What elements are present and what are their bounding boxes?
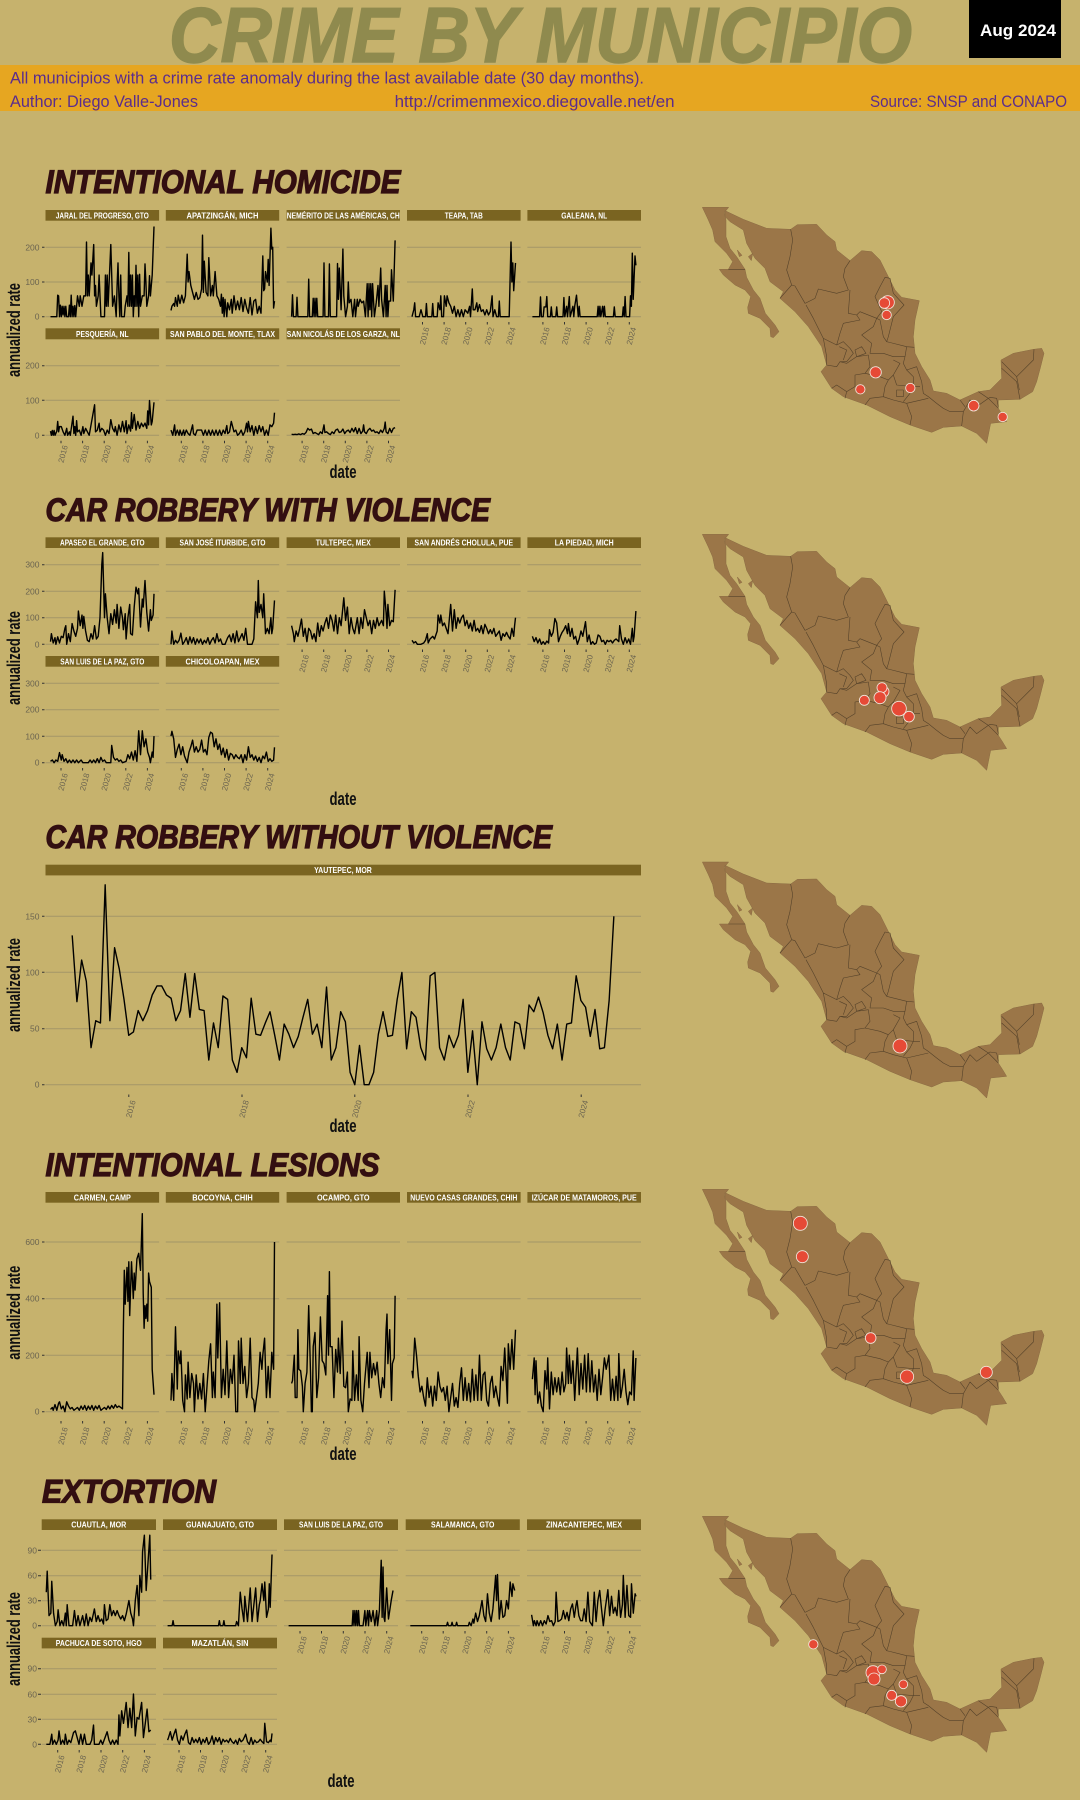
heading: INTENTIONAL LESIONS xyxy=(46,1147,380,1183)
panel: Izucar de Matamoros: 2016 xyxy=(538,1426,552,1446)
panel: Chicoloapan xyxy=(166,656,279,792)
y axis: 200 xyxy=(25,1350,40,1360)
panel: San Jose Iturbide xyxy=(166,537,279,644)
panel: Tultepec xyxy=(287,537,400,673)
y axis: 0 xyxy=(35,430,40,440)
panel: Pachuca de Soto: 2016 xyxy=(53,1754,67,1774)
y axis xyxy=(4,1545,41,1749)
panel: Teapa: 2024 xyxy=(504,326,518,346)
panel: Jaral del Progreso xyxy=(46,210,159,317)
panel: Salamanca: 2018 xyxy=(439,1635,452,1655)
y axis: 0 xyxy=(35,1080,40,1090)
y axis: 60 xyxy=(28,1689,37,1699)
y axis: 90 xyxy=(28,1545,37,1555)
panel: Cuautla: CUAUTLA, MOR xyxy=(71,1520,126,1530)
panel: San Pablo del Monte: SAN PABLO DEL MONTE, TLAX xyxy=(170,329,275,339)
heading: CAR ROBBERY WITHOUT VIOLENCE xyxy=(46,819,553,855)
panel: Galeana: GALEANA, NL xyxy=(561,210,607,220)
panel: Izucar de Matamoros: IZÚCAR DE MATAMOROS, PUE xyxy=(532,1191,637,1202)
y axis: 30 xyxy=(28,1596,37,1606)
panel: San Luis de la Paz: 2016 xyxy=(57,772,70,792)
panel: San Nicolas de los Garza: 2018 xyxy=(319,444,333,464)
y axis: 600 xyxy=(25,1237,40,1247)
panel: Yautepec: 2018 xyxy=(238,1099,251,1119)
panel: Bocoyna: 2016 xyxy=(177,1426,190,1446)
panel: San Luis de la Paz (extortion) xyxy=(284,1519,398,1655)
panel: Pesqueria: 2020 xyxy=(100,444,113,464)
panel: San Pablo del Monte: 2022 xyxy=(242,444,255,464)
panel: Apaseo el Grande xyxy=(46,537,159,644)
panel: Izucar de Matamoros: 2024 xyxy=(625,1426,638,1446)
y axis: annualized rate xyxy=(4,1266,24,1360)
map: car robbery without violence xyxy=(702,862,1044,1098)
panel: Tultepec: 2022 xyxy=(362,653,376,673)
panel: Tultepec: 2024 xyxy=(384,653,397,673)
x axis title: date xyxy=(330,789,356,809)
panel: Mazatlan xyxy=(163,1638,277,1774)
x axis title: date xyxy=(330,462,356,482)
y axis: 50 xyxy=(30,1024,40,1034)
x axis title: date xyxy=(328,1771,354,1791)
y axis: 0 xyxy=(32,1739,37,1749)
panel: Galeana: 2018 xyxy=(560,326,573,346)
panel: Pesqueria: 2016 xyxy=(57,444,70,464)
y axis: 0 xyxy=(35,1407,40,1417)
panel: Pachuca de Soto: 2018 xyxy=(75,1754,88,1774)
panel: Bocoyna: BOCOYNA, CHIH xyxy=(192,1192,253,1202)
panel: Mazatlan: MAZATLÁN, SIN xyxy=(192,1638,248,1648)
panel: Galeana: 2016 xyxy=(538,326,552,346)
y axis: annualized rate xyxy=(4,611,24,705)
panel: San Andres Cholula: 2020 xyxy=(461,653,475,673)
y axis: 300 xyxy=(25,678,40,688)
panel: Teapa xyxy=(407,210,521,346)
panel: Galeana: 2024 xyxy=(625,326,638,346)
panel: Galeana xyxy=(527,210,641,346)
panel: Pachuca de Soto: PACHUCA DE SOTO, HGO xyxy=(56,1638,142,1648)
panel: Yautepec: 2016 xyxy=(124,1099,138,1119)
panel: Jaral del Progreso: JARAL DEL PROGRESO, GTO xyxy=(56,210,149,220)
panel: Ocampo: 2016 xyxy=(298,1426,311,1446)
x axis title: date xyxy=(330,1116,356,1136)
panel: Pesqueria: 2024 xyxy=(143,444,156,464)
panel: Ocampo: 2022 xyxy=(362,1426,376,1446)
panel: San Luis de la Paz: 2024 xyxy=(143,772,156,792)
y axis xyxy=(4,1237,44,1417)
y axis: 400 xyxy=(25,1294,40,1304)
panel: Ocampo: 2018 xyxy=(319,1426,333,1446)
panel: San Luis de la Paz (extortion): 2020 xyxy=(339,1635,352,1655)
panel: San Luis de la Paz (extortion): 2022 xyxy=(361,1635,374,1655)
panel: Pachuca de Soto: 2024 xyxy=(140,1754,153,1774)
panel: Salamanca: 2020 xyxy=(461,1635,474,1655)
y axis xyxy=(4,560,44,768)
panel: Bocoyna xyxy=(166,1192,279,1446)
y axis: 100 xyxy=(25,277,40,287)
y axis: 200 xyxy=(25,586,40,596)
panel: Bocoyna: 2020 xyxy=(220,1426,233,1446)
heading: INTENTIONAL HOMICIDE xyxy=(46,164,402,200)
y axis: 90 xyxy=(28,1664,37,1674)
panel: San Andres Cholula xyxy=(407,537,521,673)
info band: http://crimenmexico.diegovalle.net/en xyxy=(395,92,675,111)
panel: Pachuca de Soto: 2020 xyxy=(97,1754,110,1774)
y axis: annualized rate xyxy=(4,938,24,1032)
panel: Galeana: 2020 xyxy=(582,326,595,346)
panel: Salamanca xyxy=(406,1519,520,1655)
section: intentional lesions xyxy=(4,1147,1044,1464)
panel: Apatzingan: APATZINGÁN, MICH xyxy=(187,210,259,220)
panel: Ocampo: 2020 xyxy=(341,1426,354,1446)
heading: EXTORTION xyxy=(42,1474,217,1510)
panel: Zinacantepec: 2016 xyxy=(539,1635,552,1655)
panel: Mazatlan: 2018 xyxy=(196,1754,209,1774)
panel: San Nicolas de los Garza xyxy=(287,328,400,464)
panel: Pesqueria xyxy=(46,328,159,464)
panel: Carmen xyxy=(46,1192,159,1446)
panel: Pachuca de Soto: 2022 xyxy=(118,1754,132,1774)
section: intentional homicide xyxy=(4,164,1044,482)
panel: Teapa: 2022 xyxy=(483,326,496,346)
panel: San Andres Cholula: 2016 xyxy=(418,653,431,673)
panel: Zinacantepec: 2020 xyxy=(582,1635,595,1655)
panel: Benemerito de las Americas xyxy=(287,210,400,317)
panel: San Pablo del Monte xyxy=(166,328,279,464)
panel: Carmen: 2022 xyxy=(121,1426,135,1446)
y axis: 150 xyxy=(25,911,40,921)
panel: Carmen: 2016 xyxy=(57,1426,70,1446)
panel: La Piedad: 2020 xyxy=(582,653,595,673)
panel: San Pablo del Monte: 2016 xyxy=(177,444,190,464)
date badge: Aug 2024 xyxy=(980,21,1057,40)
y axis: 100 xyxy=(25,967,40,977)
panel: San Luis de la Paz (extortion): 2016 xyxy=(296,1635,309,1655)
panel: Benemerito de las Americas: NEMÉRITO DE LAS AMÉRICAS, CH xyxy=(287,210,400,220)
info band: Author: Diego Valle-Jones xyxy=(10,92,198,111)
panel: Zinacantepec: ZINACANTEPEC, MEX xyxy=(546,1520,622,1530)
map: extortion xyxy=(702,1516,1044,1752)
panel: La Piedad: 2016 xyxy=(538,653,552,673)
panel: San Luis de la Paz (extortion): 2018 xyxy=(317,1635,330,1655)
panel: San Luis de la Paz (extortion): SAN LUIS DE LA PAZ, GTO xyxy=(299,1520,383,1530)
panel: Nuevo Casas Grandes: 2016 xyxy=(418,1426,431,1446)
panel: Nuevo Casas Grandes: 2020 xyxy=(461,1426,475,1446)
panel: Nuevo Casas Grandes: 2024 xyxy=(504,1426,518,1446)
panel: Ocampo: 2024 xyxy=(384,1426,397,1446)
panel: San Luis de la Paz (extortion): 2024 xyxy=(382,1635,396,1655)
panel: San Jose Iturbide: SAN JOSÉ ITURBIDE, GTO xyxy=(180,538,266,548)
panel: Tultepec: 2018 xyxy=(319,653,333,673)
panel: Izucar de Matamoros: 2020 xyxy=(582,1426,595,1446)
panel: Salamanca: 2024 xyxy=(504,1635,517,1655)
map: car robbery with violence xyxy=(702,534,1044,770)
panel: San Andres Cholula: SAN ANDRÉS CHOLULA, PUE xyxy=(415,538,513,548)
date badge xyxy=(969,0,1061,58)
panel: Mazatlan: 2016 xyxy=(175,1754,188,1774)
section: car robbery with violence xyxy=(4,492,1044,809)
panel: San Luis de la Paz: 2020 xyxy=(100,772,113,792)
panel: San Nicolas de los Garza: 2016 xyxy=(298,444,311,464)
y axis: annualized rate xyxy=(4,1592,24,1686)
panel: San Nicolas de los Garza: SAN NICOLÁS DE LOS GARZA, NL xyxy=(287,329,400,339)
panel: Chicoloapan: CHICOLOAPAN, MEX xyxy=(186,656,260,666)
panel: Apatzingan xyxy=(166,210,279,317)
y axis xyxy=(4,911,44,1090)
y axis: 0 xyxy=(35,639,40,649)
panel: Chicoloapan: 2016 xyxy=(177,772,190,792)
panel: Carmen: 2018 xyxy=(78,1426,92,1446)
panel: San Andres Cholula: 2022 xyxy=(483,653,496,673)
panel: Cuautla xyxy=(42,1519,156,1626)
panel: Salamanca: 2022 xyxy=(482,1635,496,1655)
panel: Zinacantepec: 2018 xyxy=(560,1635,573,1655)
panel: Chicoloapan: 2018 xyxy=(198,772,212,792)
y axis: 200 xyxy=(25,361,40,371)
y axis: 200 xyxy=(25,242,40,252)
panel: San Nicolas de los Garza: 2020 xyxy=(341,444,354,464)
panel: Pesqueria: 2022 xyxy=(121,444,135,464)
panel: San Luis de la Paz: 2018 xyxy=(78,772,92,792)
panel: Tultepec: 2016 xyxy=(298,653,311,673)
panel: Carmen: 2020 xyxy=(100,1426,113,1446)
panel: San Luis de la Paz: SAN LUIS DE LA PAZ, GTO xyxy=(60,656,145,666)
panel: Nuevo Casas Grandes xyxy=(407,1192,521,1446)
panel: San Pablo del Monte: 2018 xyxy=(198,444,212,464)
panel: Pesqueria: 2018 xyxy=(78,444,92,464)
y axis: 300 xyxy=(25,560,40,570)
panel: Tultepec: TULTEPEC, MEX xyxy=(316,538,371,548)
panel: Guanajuato: GUANAJUATO, GTO xyxy=(186,1520,254,1530)
panel: San Luis de la Paz xyxy=(46,656,159,792)
panel: Tultepec: 2020 xyxy=(341,653,354,673)
panel: San Pablo del Monte: 2020 xyxy=(220,444,233,464)
panel: Nuevo Casas Grandes: NUEVO CASAS GRANDES, CHIH xyxy=(410,1192,517,1202)
panel: Teapa: 2020 xyxy=(461,326,475,346)
y axis xyxy=(4,242,44,440)
x axis title: date xyxy=(330,1444,356,1464)
panel: San Nicolas de los Garza: 2022 xyxy=(362,444,376,464)
panel: Izucar de Matamoros: 2022 xyxy=(603,1426,617,1446)
panel: Yautepec: 2020 xyxy=(350,1099,364,1119)
panel: Bocoyna: 2018 xyxy=(198,1426,212,1446)
panel: San Nicolas de los Garza: 2024 xyxy=(384,444,397,464)
panel: Chicoloapan: 2024 xyxy=(263,772,277,792)
y axis: 100 xyxy=(25,613,40,623)
panel: Yautepec xyxy=(46,865,641,1119)
panel: Izucar de Matamoros xyxy=(527,1191,641,1446)
panel: La Piedad: LA PIEDAD, MICH xyxy=(555,538,614,548)
panel: Pachuca de Soto xyxy=(42,1638,156,1774)
panel: Salamanca: 2016 xyxy=(417,1635,431,1655)
panel: Pesqueria: PESQUERÍA, NL xyxy=(76,329,129,339)
panel: Nuevo Casas Grandes: 2018 xyxy=(440,1426,453,1446)
info band: All municipios with a crime rate anomaly during the last available date (30 day months). xyxy=(10,68,644,88)
panel: Carmen: 2024 xyxy=(143,1426,156,1446)
map: intentional lesions xyxy=(702,1189,1044,1425)
panel: Teapa: 2016 xyxy=(418,326,431,346)
heading: CAR ROBBERY WITH VIOLENCE xyxy=(46,492,491,528)
section: car robbery without violence xyxy=(4,819,1044,1136)
panel: Mazatlan: 2024 xyxy=(261,1754,275,1774)
panel: San Luis de la Paz: 2022 xyxy=(121,772,135,792)
panel: Carmen: CARMEN, CAMP xyxy=(74,1192,131,1202)
panel: Yautepec: 2024 xyxy=(577,1099,590,1119)
panel: Bocoyna: 2022 xyxy=(242,1426,255,1446)
panel: San Andres Cholula: 2024 xyxy=(504,653,518,673)
map: intentional homicide xyxy=(702,207,1044,443)
panel: Nuevo Casas Grandes: 2022 xyxy=(483,1426,496,1446)
panel: Yautepec: YAUTEPEC, MOR xyxy=(314,865,372,875)
y axis: 100 xyxy=(25,395,40,405)
y axis: 0 xyxy=(35,758,40,768)
panel: La Piedad: 2024 xyxy=(625,653,638,673)
panel: San Pablo del Monte: 2024 xyxy=(263,444,277,464)
panel: Mazatlan: 2022 xyxy=(240,1754,253,1774)
panel: Izucar de Matamoros: 2018 xyxy=(560,1426,573,1446)
panel: Zinacantepec xyxy=(527,1519,641,1655)
info band xyxy=(0,65,1080,111)
panel: Ocampo xyxy=(287,1192,400,1446)
panel: San Andres Cholula: 2018 xyxy=(440,653,453,673)
y axis: 0 xyxy=(35,312,40,322)
panel: Chicoloapan: 2022 xyxy=(242,772,255,792)
panel: Chicoloapan: 2020 xyxy=(220,772,233,792)
panel: Ocampo: OCAMPO, GTO xyxy=(317,1192,370,1202)
panel: Guanajuato xyxy=(163,1519,277,1626)
y axis: 30 xyxy=(28,1714,37,1724)
panel: Galeana: 2022 xyxy=(603,326,617,346)
panel: La Piedad: 2018 xyxy=(560,653,573,673)
panel: Mazatlan: 2020 xyxy=(218,1754,231,1774)
panel: Teapa: TEAPA, TAB xyxy=(445,210,483,220)
panel: Teapa: 2018 xyxy=(440,326,453,346)
section: extortion xyxy=(4,1474,1044,1791)
panel: Yautepec: 2022 xyxy=(464,1099,477,1119)
y axis: 0 xyxy=(32,1621,37,1631)
y axis: 200 xyxy=(25,705,40,715)
panel: Bocoyna: 2024 xyxy=(263,1426,277,1446)
panel: La Piedad xyxy=(527,537,641,673)
y axis: annualized rate xyxy=(4,283,24,377)
panel: Apaseo el Grande: APASEO EL GRANDE, GTO xyxy=(60,538,145,548)
panel: Zinacantepec: 2022 xyxy=(604,1635,617,1655)
y axis: 60 xyxy=(28,1571,37,1581)
y axis: 100 xyxy=(25,731,40,741)
panel: La Piedad: 2022 xyxy=(603,653,617,673)
panel: Zinacantepec: 2024 xyxy=(625,1635,639,1655)
panel: Salamanca: SALAMANCA, GTO xyxy=(431,1520,495,1530)
